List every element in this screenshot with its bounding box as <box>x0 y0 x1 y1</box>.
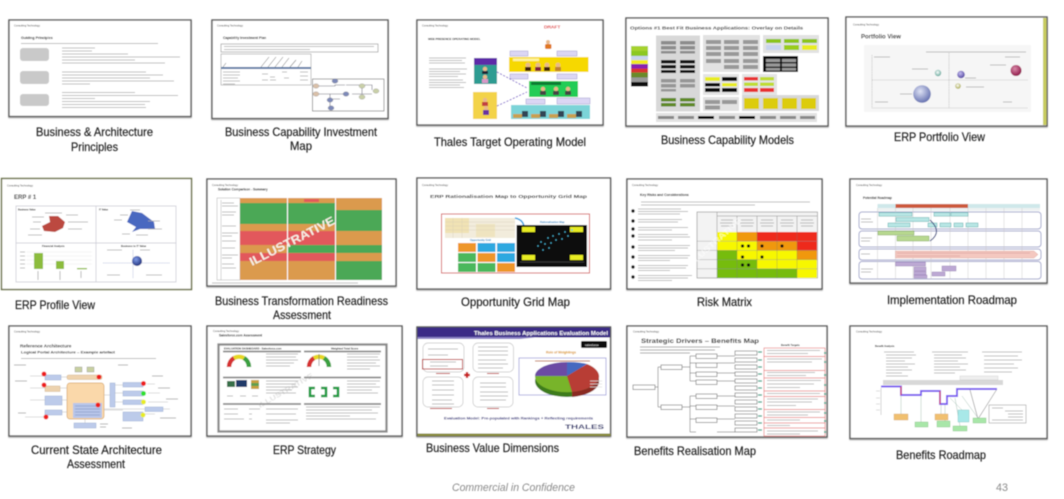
swimlane rows <box>859 212 1041 279</box>
title: erp profile view: ERP Profile View <box>15 299 96 312</box>
bubble chart <box>864 45 1031 112</box>
slide header text: Consulting Technology <box>14 24 41 28</box>
slide heading: Strategic Drivers – Benefits Map <box>641 338 759 345</box>
business to it value quadrant: Business to IT Value <box>121 244 147 248</box>
slide header text: Consulting Technology <box>14 330 41 334</box>
green bars <box>878 231 929 241</box>
connector lines <box>25 376 170 423</box>
gauge commentary <box>266 354 380 369</box>
title: business capability investment map: Map <box>290 140 312 153</box>
draft stamp: DRAFT <box>544 24 560 30</box>
central orange block <box>67 383 104 419</box>
readiness heat table <box>217 198 382 280</box>
slide header text: Consulting Technology <box>422 24 449 28</box>
v shaped trend <box>970 389 997 419</box>
title: business capability investment map: Business Capability Investment <box>225 126 378 139</box>
panel: capability investment map <box>212 20 388 118</box>
title: business transformation readiness assessment: Assessment <box>273 309 332 322</box>
top tan bar <box>67 375 102 380</box>
scorecard heading <box>224 346 359 350</box>
process flow diagram <box>312 79 384 111</box>
red highlight box <box>422 360 462 369</box>
footer: page number: 43 <box>996 482 1008 494</box>
analysis bullets <box>884 352 1022 376</box>
label text <box>14 365 178 428</box>
title: business transformation readiness assessment <box>215 295 388 322</box>
purple header bar: Thales Business Applications Evaluation Model <box>474 331 609 337</box>
panel: benefits realisation map <box>627 326 827 437</box>
slide subheading: Logical Portal Architecture – Example artefact <box>21 350 116 354</box>
title: business and architecture principles: Principles <box>71 141 118 154</box>
dashed connectors <box>497 72 527 106</box>
intro text <box>641 202 810 205</box>
left gauge <box>229 357 249 367</box>
description box <box>221 44 378 52</box>
slide header text: Consulting Technology <box>217 24 244 28</box>
green capability bar <box>529 81 578 97</box>
principle boxes <box>20 48 49 106</box>
title: current state architecture assessment: Current State Architecture <box>31 444 162 457</box>
olive side band <box>1043 18 1046 125</box>
green callouts <box>915 418 986 431</box>
business to it value quadrant <box>103 244 170 278</box>
teal connector markers <box>758 352 762 430</box>
slide header text: Consulting Technology <box>856 330 883 334</box>
slide heading: ERP # 1 <box>14 195 37 201</box>
right edge markers <box>824 352 826 433</box>
bottom strip <box>656 113 817 122</box>
panel: erp strategy <box>207 326 402 436</box>
red step markers <box>901 386 940 404</box>
title: benefits realisation map: Benefits Realisation Map <box>634 445 756 458</box>
panel: current state architecture <box>9 326 191 436</box>
grey capability column <box>656 36 700 112</box>
blue curved arrow <box>515 218 524 228</box>
chart grid frame <box>16 206 176 282</box>
yellow team card <box>473 92 497 119</box>
investment table <box>221 54 311 85</box>
3d pie chart <box>535 362 599 397</box>
intro text <box>21 358 156 360</box>
olive base line <box>418 434 610 436</box>
level four boxes <box>735 351 757 432</box>
risk matrix grid <box>697 212 818 278</box>
description text <box>429 58 467 88</box>
benefits axis <box>876 388 881 415</box>
grey lower block <box>703 97 739 111</box>
risk bullets <box>631 209 692 280</box>
red benefit boxes <box>764 348 825 436</box>
slide header text: Consulting Technology <box>632 183 659 187</box>
panel: target operating model <box>417 20 603 125</box>
slide header text: Consulting Technology <box>212 183 239 187</box>
panel: benefits roadmap <box>850 326 1047 438</box>
model statement: Evaluation Model: Pre-populated with Rankings + Reflecting requirements <box>444 416 593 420</box>
illustrative watermark: ILLUSTRATIVE <box>258 372 315 410</box>
colour legend <box>631 46 648 86</box>
analysis heading: Benefit Analysis <box>875 345 895 348</box>
slide header text: Consulting Technology <box>633 330 660 334</box>
timeline header <box>878 204 1040 211</box>
financial analysis bar chart <box>20 244 92 280</box>
title: erp portfolio view: ERP Portfolio View <box>894 131 986 144</box>
title: current state architecture assessment <box>31 444 162 471</box>
panel: business value dimensions <box>417 327 610 436</box>
thales wordmark: THALES <box>565 425 604 431</box>
slide heading: Options #1 Best Fit Business Applications: Overlay on Details <box>630 26 804 30</box>
opportunity grid <box>458 238 515 272</box>
black scatter chart: Rationalisation Map <box>540 220 565 224</box>
right gauge <box>309 354 329 367</box>
panel: erp profile view <box>2 178 192 290</box>
title: business transformation readiness assessment: Business Transformation Readiness <box>215 295 388 308</box>
it value radar <box>99 208 162 235</box>
title: business capability models: Business Capability Models <box>661 134 794 147</box>
teal bars <box>879 212 978 227</box>
title: opportunity grid map: Opportunity Grid Map <box>461 296 570 309</box>
slide heading: Reference Architecture <box>20 344 72 348</box>
slide header text: Consulting Technology <box>7 184 34 188</box>
level three boxes <box>696 354 717 422</box>
slide header text: Consulting Technology <box>213 329 240 333</box>
summary box <box>989 405 1026 423</box>
footer: confidentiality note: Commercial in Confidence <box>452 482 575 494</box>
slide heading: Salesforce.com Assessment <box>219 334 263 338</box>
green capability block <box>763 35 819 53</box>
red plus <box>464 372 470 378</box>
strategy commentary <box>266 381 380 393</box>
teal delivery team bar <box>511 105 590 119</box>
red dimension labels <box>430 374 499 408</box>
title: business value dimensions: Business Value Dimensions <box>426 442 559 455</box>
principle bullet text <box>21 44 180 108</box>
title: current state architecture assessment: Assessment <box>67 458 126 471</box>
slide heading: Guiding Principles <box>21 36 53 40</box>
panel: transformation readiness summary <box>207 179 396 286</box>
slide header text: Consulting Technology <box>422 183 449 187</box>
scorecard frame <box>218 344 386 432</box>
scorecard heading: EVALUATION DASHBOARD - Salesforce.com <box>224 346 282 350</box>
benefit target heading: Benefit Targets <box>781 343 800 347</box>
top person icon <box>545 40 552 49</box>
panel: erp portfolio view <box>846 17 1047 126</box>
salesforce badge <box>581 341 607 348</box>
section header bars <box>223 352 381 404</box>
yellow capability bar <box>509 57 588 72</box>
callout leader lines <box>901 395 978 426</box>
lane labels <box>861 219 873 272</box>
red frame <box>442 214 590 273</box>
business value radar <box>18 208 88 235</box>
dimension text <box>428 347 508 404</box>
salesforce badge: salesforce <box>585 343 599 347</box>
benefit text <box>767 350 822 434</box>
panel: business and architecture principles <box>9 20 191 116</box>
scorecard heading: Weighted Total Score <box>331 346 359 350</box>
orange callouts <box>894 414 948 420</box>
risk colour block <box>742 74 777 95</box>
left tan box <box>45 386 60 392</box>
benefits step line <box>881 386 997 404</box>
panel: business capability models <box>626 18 828 126</box>
dimension boxes <box>423 343 514 407</box>
purple header bar <box>418 328 610 339</box>
scores and recommendations <box>224 407 380 423</box>
lilac role boxes <box>510 51 590 104</box>
slide heading: ERP Rationalisation Map to Opportunity Grid Map <box>430 194 587 200</box>
pink bar <box>896 251 1038 258</box>
illustrative watermark: ILLUSTRATIVE <box>247 214 337 269</box>
panel: risk matrix <box>627 179 822 289</box>
chart frame <box>519 358 606 395</box>
slide heading: Key Risks and Considerations <box>640 193 689 197</box>
right blue boxes <box>74 382 163 428</box>
slide header text: Consulting Technology <box>853 22 880 26</box>
title: risk matrix: Risk Matrix <box>697 296 752 309</box>
title: business and architecture principles <box>36 126 153 154</box>
title: implementation roadmap: Implementation Roadmap <box>887 294 1017 307</box>
slide heading: WEB PRESENCE OPERATING MODEL <box>428 37 481 41</box>
source data table <box>445 218 515 238</box>
mixed block <box>703 74 739 95</box>
title: business capability investment map <box>225 126 378 153</box>
title: business and architecture principles: Business & Architecture <box>36 126 153 139</box>
weightings label: Role of Weightings <box>546 350 576 354</box>
chart caption <box>535 360 590 362</box>
financial analysis bar chart: Financial Analysis <box>42 244 65 248</box>
yellow lower block <box>742 95 819 111</box>
dependency arrow <box>930 220 936 241</box>
intro text <box>640 347 720 353</box>
green status brackets <box>310 388 338 396</box>
slide heading: Solution Comparison - Summary <box>218 188 268 192</box>
business value radar: Business Value <box>18 208 36 212</box>
title: erp strategy: ERP Strategy <box>273 444 336 457</box>
application icons <box>227 380 259 396</box>
user icons <box>75 367 94 372</box>
title: thales target operating model: Thales Target Operating Model <box>434 136 586 149</box>
slide header text: Consulting Technology <box>856 183 883 187</box>
black capability block <box>763 56 798 72</box>
timeline grid <box>878 208 1022 279</box>
slide heading: Potential Roadmap <box>863 196 892 200</box>
tree connectors <box>655 356 735 432</box>
opportunity grid: Opportunity Grid <box>470 238 491 242</box>
grey capability block <box>703 35 760 72</box>
teal callout <box>958 410 969 422</box>
it value radar: IT Value <box>99 208 109 212</box>
black scatter chart <box>516 220 587 267</box>
grey summary strip <box>883 376 1003 385</box>
panel: opportunity grid map <box>417 178 610 289</box>
panel: implementation roadmap <box>850 179 1047 283</box>
left blue boxes <box>45 375 62 415</box>
root driver box <box>633 385 655 390</box>
purple bars <box>896 262 956 278</box>
illustrative watermark: ILLUSTRATIVE <box>685 215 744 269</box>
chart legend <box>590 381 602 387</box>
teal team card <box>474 58 497 84</box>
slide heading: Capability Investment Plan <box>223 36 266 40</box>
slide heading: Portfolio View <box>861 34 901 40</box>
table footnote <box>212 282 358 284</box>
title: benefits roadmap: Benefits Roadmap <box>896 449 986 462</box>
level two boxes <box>661 365 682 410</box>
status dots <box>42 372 146 419</box>
